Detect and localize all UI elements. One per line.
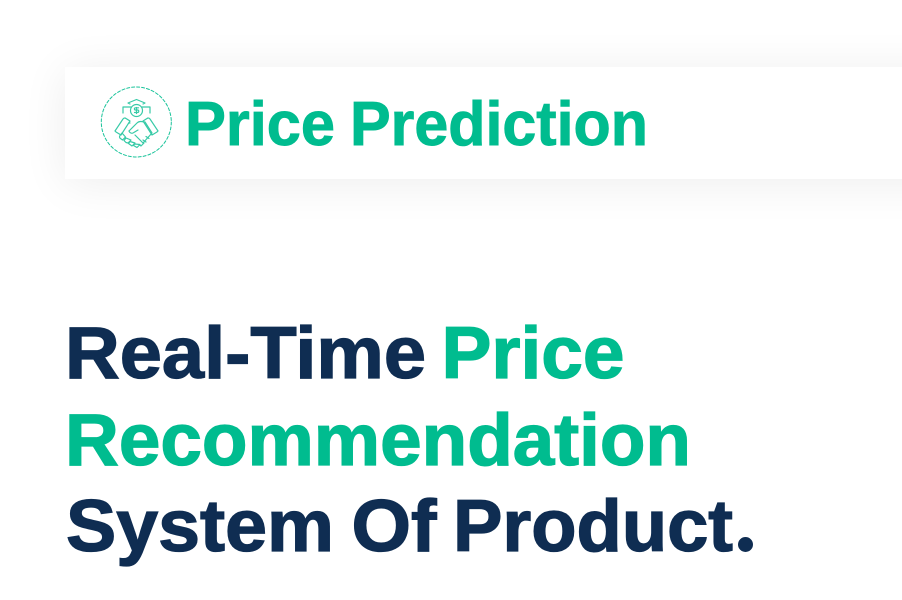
main heading (65, 313, 753, 567)
word: Real-Time: Real-Time (65, 313, 426, 394)
word: Product: Product (453, 486, 733, 567)
word: Of: Of (352, 486, 437, 567)
word: Price: Price (185, 90, 335, 159)
icon: handshake with dollar badge (101, 87, 171, 157)
header title (185, 90, 648, 159)
word: Prediction: Prediction (350, 90, 648, 159)
full stop (738, 537, 753, 552)
word: Price: Price (442, 313, 624, 394)
header bar (65, 67, 902, 179)
word: System: System (66, 486, 334, 567)
heading line 2: Recommendation (65, 400, 691, 481)
